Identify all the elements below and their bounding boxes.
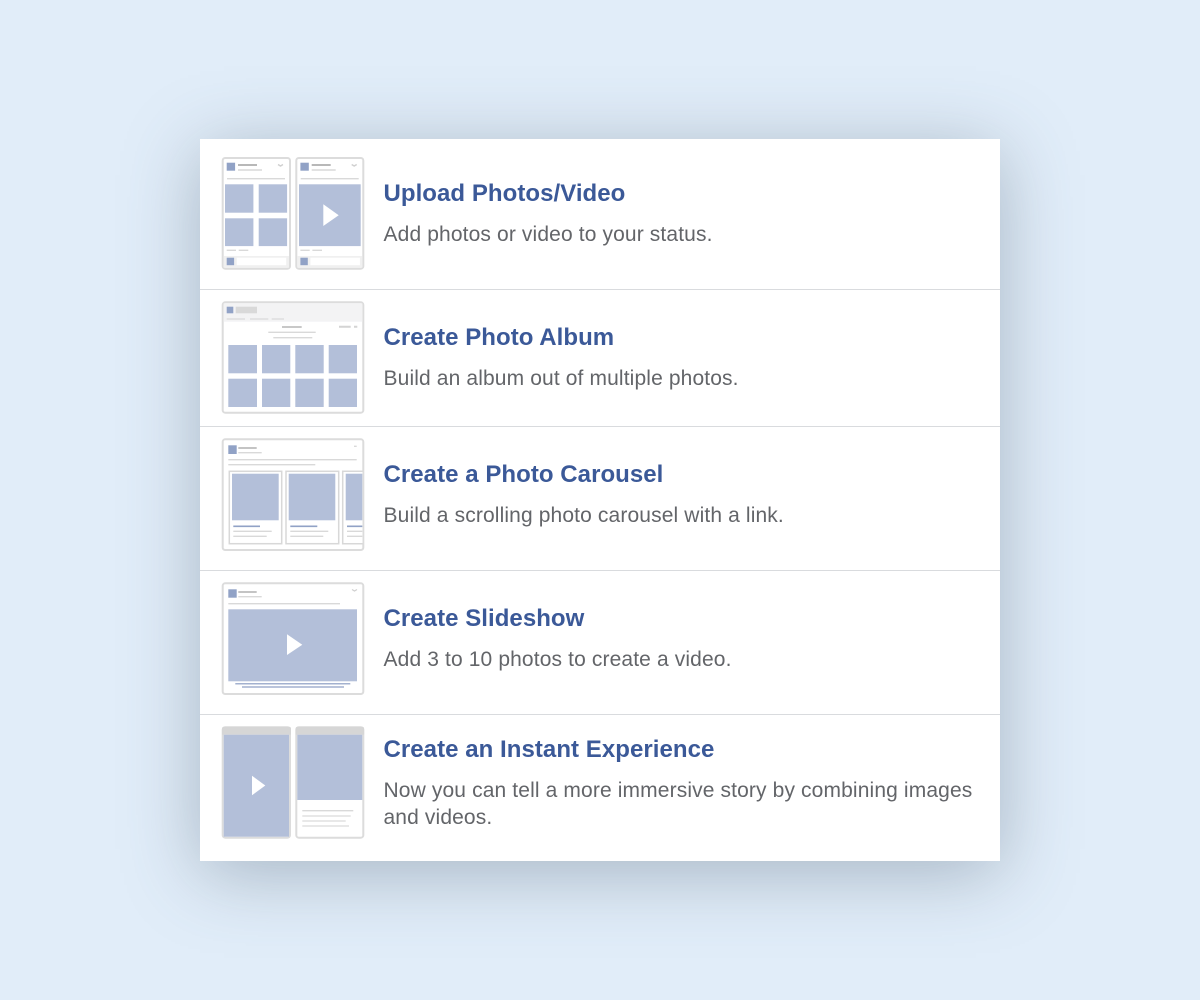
panel: post type menu card <box>200 139 1000 861</box>
icon: slideshow video thumbnail <box>222 582 364 695</box>
description: Add photos or video to your status. <box>384 223 713 246</box>
description: Build a scrolling photo carousel with a link. <box>384 504 784 527</box>
description: Now you can tell a more immersive story by combining images <box>384 779 972 802</box>
icon: instant experience phone thumbnails <box>222 726 364 839</box>
row: upload photos/video <box>200 139 1000 290</box>
description: Add 3 to 10 photos to create a video. <box>384 648 732 671</box>
row: create an instant experience <box>222 726 972 839</box>
description <box>384 779 972 829</box>
heading: Create a Photo Carousel <box>384 461 663 488</box>
heading: Create an Instant Experience <box>384 736 714 763</box>
row: create slideshow <box>200 571 1000 715</box>
description: Build an album out of multiple photos. <box>384 367 739 390</box>
heading: Create Photo Album <box>384 324 614 351</box>
icon: photo grid and video post thumbnails <box>222 157 364 270</box>
description: and videos. <box>384 806 492 829</box>
row: create a photo carousel <box>200 427 1000 571</box>
heading: Create Slideshow <box>384 605 584 632</box>
icon: carousel thumbnail <box>222 438 364 551</box>
row: create photo album <box>200 290 1000 427</box>
icon: photo album thumbnail <box>222 301 364 414</box>
heading: Upload Photos/Video <box>384 180 625 207</box>
